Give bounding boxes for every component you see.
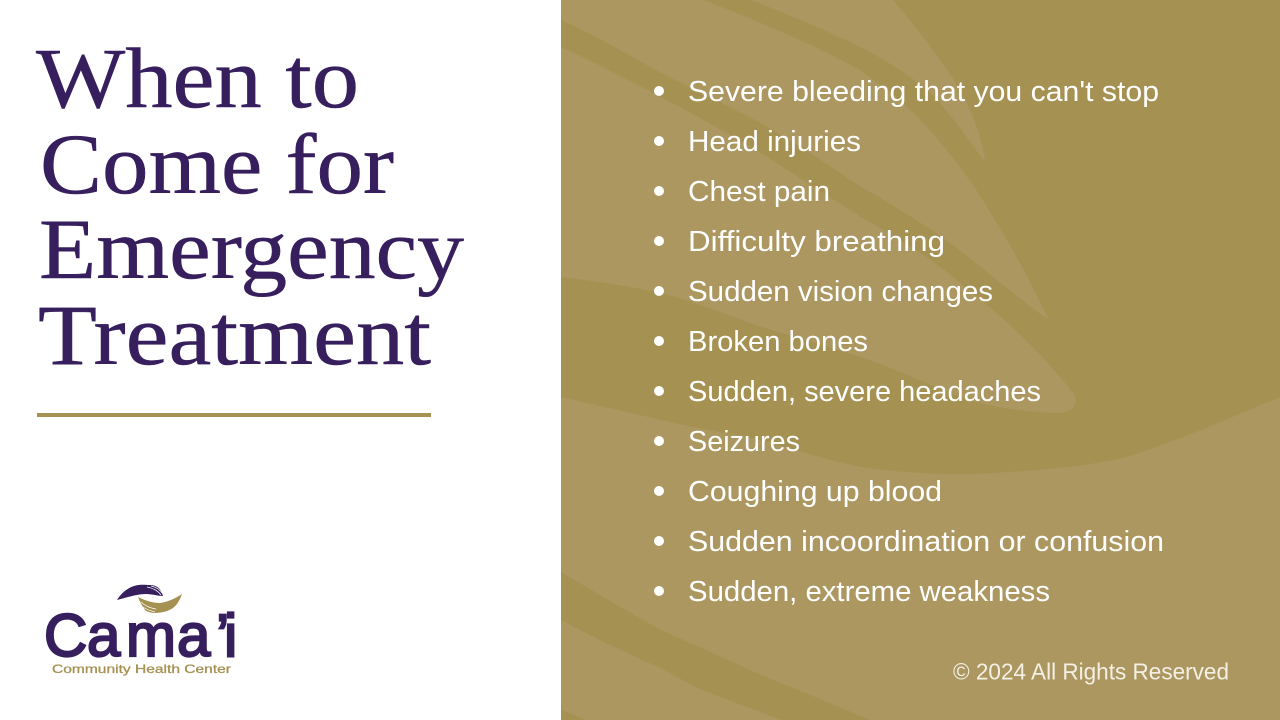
- title: Treatment: [38, 287, 431, 383]
- title: [36, 30, 464, 383]
- icon: purple wing: [117, 585, 163, 600]
- list item 4: Difficulty breathing: [688, 226, 945, 258]
- list item 6: Broken bones: [688, 326, 868, 358]
- copyright footer: © 2024 All Rights Reserved: [953, 658, 1229, 684]
- title underline rule: [37, 413, 431, 417]
- icon: gold swoosh: [138, 594, 182, 613]
- list item 7: Sudden, severe headaches: [688, 376, 1041, 408]
- logo tagline: Community Health Center: [52, 662, 231, 676]
- list item 2: Head injuries: [688, 126, 861, 158]
- list item 10: Sudden incoordination or confusion: [688, 526, 1164, 558]
- logo wordmark: Cama’i: [44, 602, 237, 669]
- list item 5: Sudden vision changes: [688, 276, 993, 308]
- background feather pattern: [561, 0, 1280, 720]
- logo: Cama'i Community Health Center: [44, 585, 237, 676]
- panel: gold right side: [561, 0, 1280, 720]
- list item 9: Coughing up blood: [688, 476, 942, 508]
- title: Come for: [40, 116, 394, 212]
- title: When to: [36, 30, 359, 126]
- list item 3: Chest pain: [688, 176, 830, 208]
- list item 11: Sudden, extreme weakness: [688, 576, 1050, 608]
- list item 8: Seizures: [688, 426, 800, 458]
- bullet list: emergency symptoms: [654, 76, 1164, 608]
- title: Emergency: [39, 201, 464, 297]
- panel: white left side: [0, 0, 561, 720]
- list item 1: Severe bleeding that you can't stop: [688, 76, 1159, 108]
